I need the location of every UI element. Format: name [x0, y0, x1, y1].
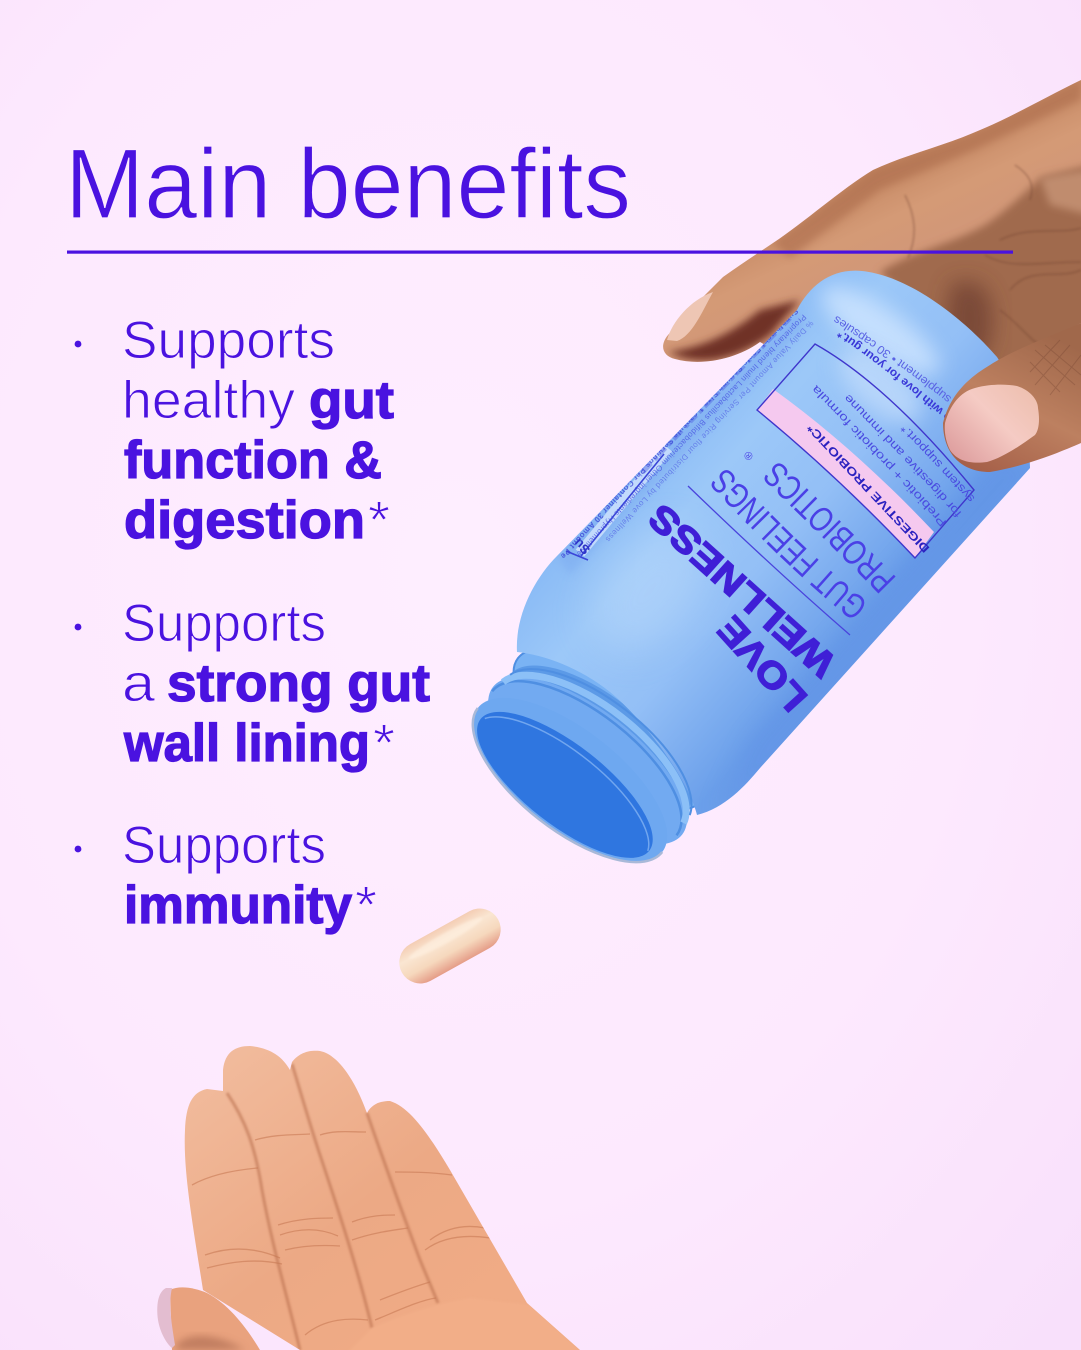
benefit 3	[75, 816, 377, 935]
label: supplement facts: % Daily Value Amount Per Serving Rice flour Distributed by Love Wellness	[606, 321, 814, 541]
lower open hand	[157, 1046, 590, 1350]
benefit 1: healthy	[122, 371, 296, 430]
lower thumb	[170, 1287, 260, 1350]
label: supplement facts: Proprietary blend Inulin Lactobacillus Bifidobacterium Other ingredients Hypromellose	[577, 314, 806, 556]
label: description: Dietary supplement • 30 capsules	[834, 316, 951, 402]
label: brand name: LOVE	[710, 608, 815, 719]
icon: thumb nail	[945, 385, 1039, 463]
bottle	[472, 270, 1030, 864]
benefit 1: Supports	[122, 311, 335, 370]
label: supplement facts: Su	[571, 535, 593, 558]
palm	[372, 1305, 576, 1346]
icon: finger nail	[667, 292, 713, 341]
benefit 1	[75, 311, 394, 550]
label: description: Prebiotic + probiotic formula	[814, 384, 946, 526]
label: pink band	[757, 389, 934, 558]
thumb	[943, 323, 1081, 472]
upper hand holding bottle	[663, 80, 1081, 362]
benefit 2: Supports	[122, 594, 326, 653]
label: badge text: DIGESTIVE PROBIOTIC*	[807, 426, 930, 553]
benefit 2: *	[373, 714, 395, 773]
label: product name: PROBIOTICS	[764, 463, 896, 594]
bottle neck threads	[462, 591, 757, 874]
benefit 1: gut	[309, 371, 394, 430]
benefit 1: digestion	[124, 491, 365, 550]
bottle mouth	[447, 638, 718, 892]
benefit 2: strong gut	[167, 654, 430, 713]
benefit 2: wall lining	[123, 714, 370, 773]
icon: lower thumb nail	[157, 1288, 175, 1348]
label: outlined box	[757, 344, 974, 558]
label: description	[814, 316, 974, 526]
bottle body	[517, 271, 1030, 815]
benefit 1: function &	[124, 431, 382, 490]
finger separations	[227, 1064, 438, 1350]
benefit 3: *	[355, 876, 377, 935]
label: product name: ®	[742, 448, 756, 462]
title: Main benefits	[65, 128, 631, 239]
title rule	[67, 250, 1013, 254]
label: description: system support.*	[900, 428, 974, 502]
benefit 3: immunity	[124, 876, 353, 935]
capsule	[392, 901, 508, 991]
label: supplement facts: Supplement Facts Serving Size 1 capsule Servings Per Container 30 Amount Per	[561, 310, 798, 558]
label: description: Made with love for your gut.*	[837, 332, 946, 418]
label: product name: GUT FEELINGS	[712, 470, 864, 618]
benefit 2	[75, 594, 430, 773]
benefit 1: *	[368, 491, 390, 550]
label: brand name: WELLNESS	[641, 496, 843, 685]
label: description: for digestive and immune	[846, 395, 961, 517]
benefit 3: Supports	[122, 816, 326, 875]
benefit 2: a	[122, 654, 156, 713]
finger creases	[192, 1132, 490, 1335]
